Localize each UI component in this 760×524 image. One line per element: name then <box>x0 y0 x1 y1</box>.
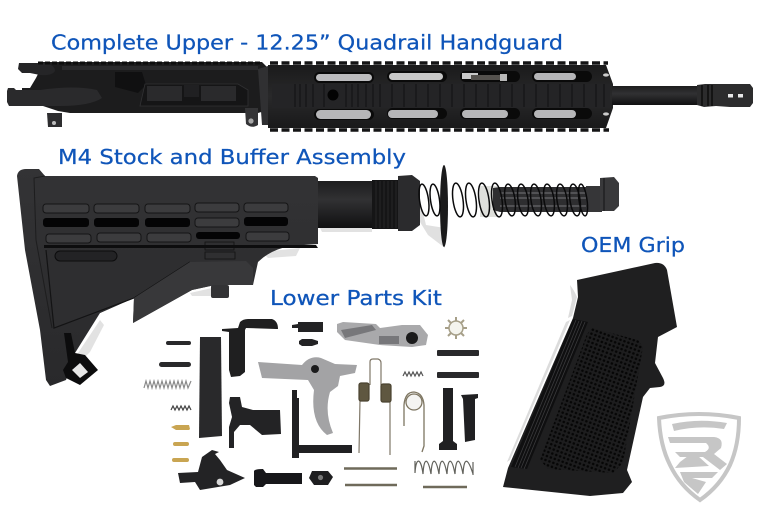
pistol grip screw <box>254 469 302 487</box>
trigger <box>258 357 357 435</box>
lower parts kit <box>144 317 479 490</box>
finger ribs <box>511 319 588 469</box>
brass detents <box>171 425 190 462</box>
lower grey dot <box>318 475 323 480</box>
bolt catch <box>222 319 278 377</box>
selector detent <box>309 471 333 485</box>
title: lower parts kit: Lower Parts Kit <box>270 286 442 310</box>
sear pin <box>217 479 223 485</box>
disconnector <box>229 397 281 448</box>
star spring washer <box>445 317 467 339</box>
right pins <box>437 350 479 378</box>
trigger spring small <box>403 372 423 376</box>
M4 stock and buffer assembly <box>17 165 619 386</box>
title: M4 stock and buffer assembly: M4 Stock and Buffer Assembly <box>58 145 406 169</box>
stock shadow <box>76 228 372 360</box>
bolt catch pins <box>292 322 323 346</box>
complete upper assembly <box>7 62 753 130</box>
buffer and spring <box>417 165 619 248</box>
buffer tube <box>318 175 420 231</box>
grip body <box>503 263 677 496</box>
large coil spring <box>415 461 473 475</box>
hammer spring <box>359 359 391 455</box>
upper receiver <box>7 62 272 127</box>
quadrail handguard <box>268 63 613 130</box>
takedown pins <box>439 388 478 450</box>
hammer <box>337 322 428 347</box>
title: OEM grip: OEM Grip <box>581 233 685 257</box>
torsion spring <box>404 392 424 452</box>
small springs left <box>144 381 191 410</box>
sear <box>178 450 245 490</box>
sling loop <box>63 333 98 385</box>
selector lever <box>292 390 352 458</box>
straight springs <box>344 468 467 487</box>
hammer detail <box>341 325 418 344</box>
collapsible stock body <box>17 169 318 386</box>
trigger guard <box>199 337 222 438</box>
small pins left <box>159 341 191 367</box>
checkered panel <box>540 328 643 473</box>
trigger pivot <box>311 365 319 373</box>
barrel and flash hider <box>612 84 753 107</box>
shield logo <box>659 414 739 500</box>
OEM pistol grip <box>503 263 677 496</box>
title: complete upper: Complete Upper - 12.25” Quadrail Handguard <box>51 30 563 54</box>
grip shadow <box>507 285 577 462</box>
